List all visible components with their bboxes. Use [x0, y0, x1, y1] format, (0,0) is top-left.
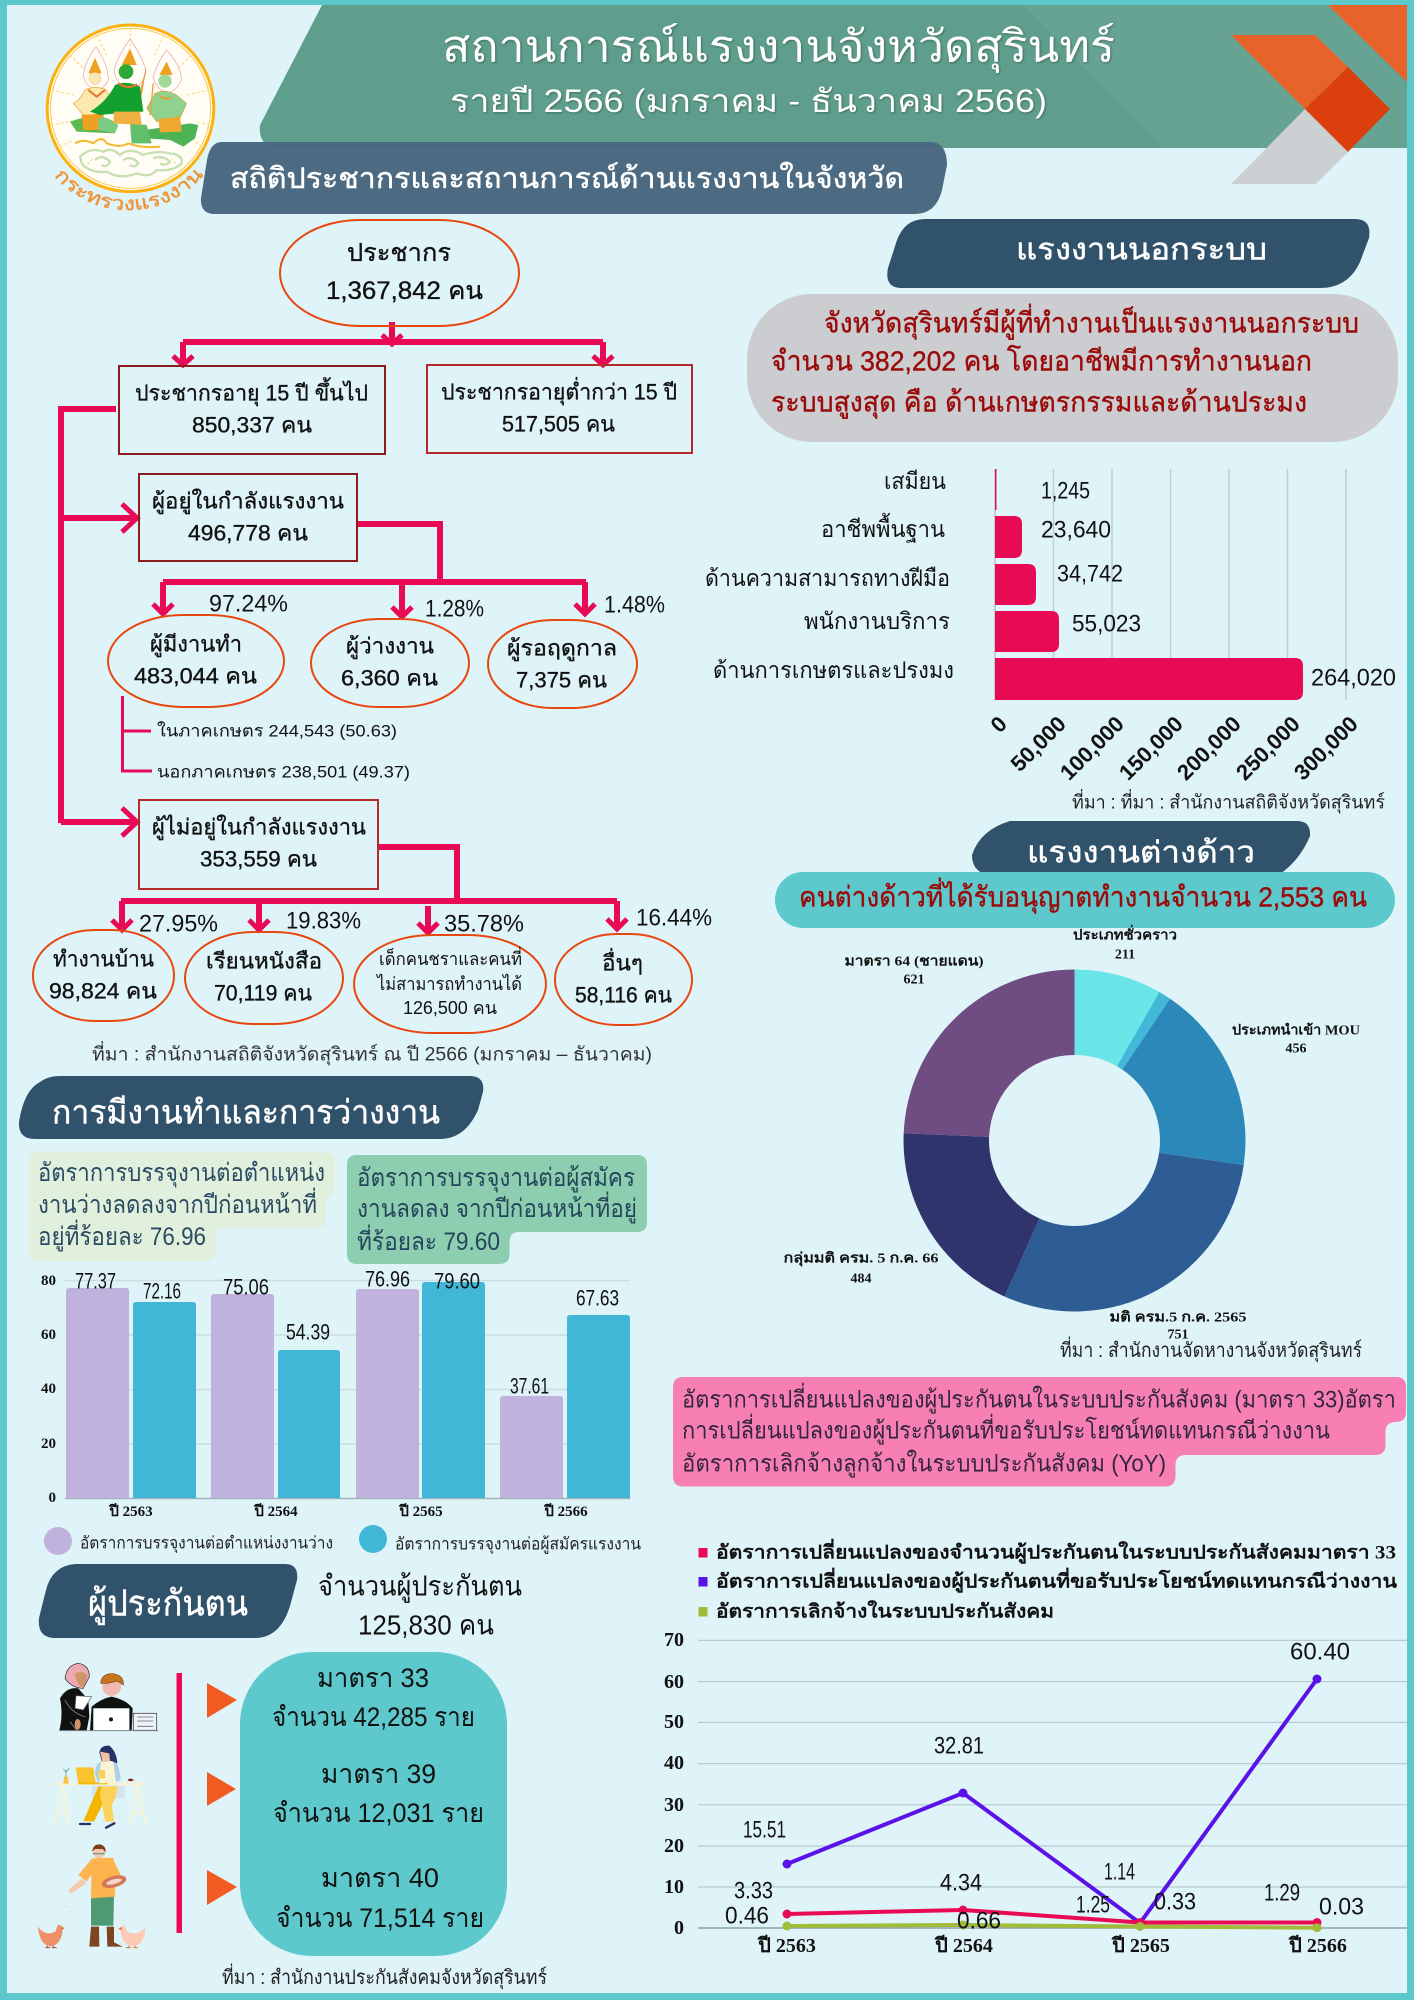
node: population: ประชากร: [347, 239, 451, 267]
divider bar: [176, 1673, 182, 1933]
bar chart axis labels: 50,000: [1006, 711, 1071, 776]
percentages: outside labour force: 19.83%: [286, 908, 361, 934]
heading: employment and unemployment: การมีงานทำและการว่างงาน: [52, 1094, 440, 1130]
flow diagram connectors: [61, 322, 627, 933]
donut labels: มติ ครม.5 ก.ค. 2565: [1110, 1310, 1246, 1326]
value labels: 15.51: [743, 1816, 786, 1844]
callout: placement per vacancy: อัตราการบรรจุงานต่อตำแหน่ง: [38, 1159, 325, 1188]
percent: unemployed: 1.28%: [425, 596, 484, 622]
node: housework: ทำงานบ้าน: [53, 946, 154, 972]
value labels: 3.33: [734, 1878, 773, 1904]
legend: line chart: อัตราการเลิกจ้างในระบบประกันสังคม: [716, 1600, 1054, 1622]
agriculture breakdown: นอกภาคเกษตร 238,501 (49.37): [157, 762, 410, 782]
callout: licensed migrant total: คนต่างด้าวที่ได้รับอนุญาตทำงานจำนวน 2,553 คน: [799, 878, 1367, 914]
donut labels: ประเภทนำเข้า MOU: [1232, 1022, 1360, 1038]
bar chart value labels: 1,245: [1041, 478, 1090, 504]
y axis labels: [41, 1273, 56, 1506]
node: children, elderly and unable to work: 126,500 คน: [403, 998, 497, 1018]
value labels: 37.61: [510, 1374, 549, 1398]
value labels: 77.37: [75, 1268, 116, 1294]
node: seasonal workers: [488, 620, 637, 708]
heading: insured persons: [39, 1564, 297, 1638]
x axis labels: [108, 1503, 588, 1520]
bar chart axis labels: 150,000: [1114, 711, 1188, 785]
callout: placement per vacancy: งานว่างลดลงจากปีก่อนหน้าที่: [38, 1187, 317, 1219]
logo cloud: [80, 150, 182, 176]
callout: social security rates: [673, 1377, 1406, 1486]
node: population: 1,367,842 คน: [326, 277, 483, 305]
y axis labels: 0: [674, 1917, 684, 1939]
callout: placement per vacancy: [28, 1152, 335, 1261]
value labels: 72.16: [143, 1278, 181, 1304]
value labels: 0.33: [1154, 1888, 1196, 1916]
y axis labels: 40: [664, 1752, 684, 1774]
heading: employment and unemployment: [19, 1076, 483, 1139]
value labels: [75, 1266, 619, 1398]
bar chart category labels: พนักงานบริการ: [804, 608, 950, 634]
bar chart category labels: ด้านความสามารถทางฝีมือ: [705, 565, 950, 591]
percentages: outside labour force: 16.44%: [636, 904, 712, 932]
arrows: [207, 1683, 237, 1905]
donut labels: 456: [1286, 1042, 1306, 1056]
x axis labels: ปี 2565: [398, 1503, 443, 1520]
source: insured persons: ที่มา : สำนักงานประกันสังคมจังหวัดสุรินทร์: [222, 1963, 547, 1990]
logo figure: centre deity: [90, 48, 152, 143]
donut labels: 211: [1115, 948, 1135, 962]
y axis labels: 20: [41, 1436, 56, 1452]
legend: placement rates: [44, 1525, 641, 1555]
node: housework: 98,824 คน: [49, 978, 157, 1004]
heading: insured persons: ผู้ประกันตน: [88, 1582, 248, 1626]
node: studying: 70,119 คน: [214, 980, 312, 1006]
source: population: ที่มา : สำนักงานสถิติจังหวัดสุรินทร์ ณ ปี 2566 (มกราคม – ธันวาคม): [92, 1040, 652, 1066]
callout: placement per applicant: [347, 1155, 647, 1264]
node: children, elderly and unable to work: [354, 935, 546, 1033]
node: outside labour force: 353,559 คน: [200, 846, 317, 872]
percentages: outside labour force: 35.78%: [444, 910, 524, 938]
y axis labels: 70: [664, 1629, 684, 1651]
y axis labels: 20: [664, 1835, 684, 1857]
node: age 15 and over: ประชากรอายุ 15 ปี ขึ้นไป: [135, 378, 368, 406]
y axis labels: 0: [48, 1490, 56, 1506]
donut labels: 484: [850, 1272, 872, 1286]
x axis labels: ปี 2563: [108, 1503, 153, 1520]
percentages: outside labour force: 27.95%: [139, 910, 218, 938]
heading: migrant workers: [972, 821, 1310, 874]
legend: line chart: อัตราการเปลี่ยนแปลงของจำนวนผู้ประกันตนในระบบประกันสังคมมาตรา 33: [716, 1538, 1396, 1564]
bar chart category labels: ด้านการเกษตรและปรงมง: [713, 657, 954, 683]
callout: social security rates: อัตราการเลิกจ้างลูกจ้างในระบบประกันสังคม (YoY): [682, 1450, 1166, 1478]
node: studying: [185, 932, 343, 1024]
node: under 15: ประชากรอายุต่ำกว่า 15 ปี: [441, 376, 677, 406]
heading: informal labour: แรงงานนอกระบบ: [1016, 234, 1267, 266]
callout: informal labour summary: จังหวัดสุรินทร์มีผู้ที่ทำงานเป็นแรงงานนอกระบบ: [824, 304, 1359, 340]
node: age 15 and over: 850,337 คน: [192, 412, 312, 438]
title banner: [260, 5, 1407, 148]
panel: insured sections: มาตรา 33: [317, 1663, 429, 1693]
heading: population and labour statistics: สถิติประชากรและสถานการณ์ด้านแรงงานในจังหวัด: [230, 161, 904, 195]
y axis labels: [664, 1629, 684, 1939]
legend: placement rates: อัตราการบรรจุงานต่อผู้สมัครแรงงาน: [395, 1534, 641, 1554]
source: informal labour: ที่มา : ที่มา : สำนักงานสถิติจังหวัดสุรินทร์: [1072, 788, 1385, 814]
percentages: outside labour force: [139, 904, 712, 938]
node: children, elderly and unable to work: ไม่สามารถทำงานได้: [375, 973, 522, 994]
node: others: อื่นๆ: [602, 948, 643, 976]
value labels: 67.63: [576, 1286, 619, 1310]
node: under 15: 517,505 คน: [502, 412, 615, 436]
y axis labels: 60: [664, 1671, 684, 1693]
bar chart value labels: 264,020: [1311, 664, 1396, 692]
panel: insured sections: จำนวน 12,031 ราย: [273, 1798, 484, 1828]
value labels: 4.34: [940, 1870, 982, 1896]
value labels: 76.96: [365, 1266, 410, 1292]
node: employed: [108, 615, 284, 707]
bar chart category labels: เสมียน: [884, 468, 946, 494]
panel: insured sections: จำนวน 42,285 ราย: [272, 1702, 475, 1732]
x axis labels: ปี 2563: [757, 1934, 816, 1957]
donut labels: 751: [1168, 1328, 1188, 1342]
x axis labels: ปี 2566: [1288, 1934, 1347, 1957]
line chart: social security rates: [664, 1629, 1407, 1957]
node: in labour force: ผู้อยู่ในกำลังแรงงาน: [152, 488, 344, 514]
value labels: 54.39: [286, 1320, 330, 1344]
node: unemployed: 6,360 คน: [341, 666, 438, 690]
panel: insured sections: มาตรา 39: [321, 1759, 436, 1789]
bar chart value labels: 23,640: [1041, 516, 1111, 544]
node: outside labour force: [139, 800, 378, 889]
bar chart axis labels: [985, 711, 1363, 785]
icon: office workers: [59, 1663, 158, 1731]
column chart: placement rates: [41, 1266, 630, 1520]
bar chart axis labels: 100,000: [1055, 711, 1129, 785]
y axis labels: 30: [664, 1794, 684, 1816]
donut chart: migrant workers by type: [904, 970, 1245, 1311]
callout: informal labour summary: ระบบสูงสุด คือ ด้านเกษตรกรรมและด้านประมง: [771, 386, 1307, 420]
bar chart axis labels: 300,000: [1289, 711, 1363, 785]
logo figure: right deity: [145, 62, 198, 147]
callout: licensed migrant total: [775, 872, 1395, 928]
icon: farmer feeding chickens: [38, 1844, 145, 1948]
callout: placement per applicant: ที่ร้อยละ 79.60: [357, 1224, 500, 1256]
donut labels: [784, 924, 1360, 1342]
x axis labels: ปี 2564: [253, 1503, 298, 1520]
node: under 15: [427, 365, 692, 453]
donut labels: 621: [904, 972, 924, 988]
source: migrant workers: ที่มา : สำนักงานจัดหางานจังหวัดสุรินทร์: [1060, 1336, 1362, 1363]
bar chart category labels: [705, 468, 954, 683]
donut labels: กลุ่มมติ ครม. 5 ก.ค. 66: [784, 1250, 938, 1266]
legend: line chart: [698, 1538, 1397, 1622]
bar chart value labels: 55,023: [1072, 610, 1141, 638]
node: studying: เรียนหนังสือ: [206, 948, 322, 974]
x axis labels: [757, 1934, 1347, 1957]
heading: informal labour: [887, 219, 1369, 288]
callout: placement per applicant: อัตราการบรรจุงานต่อผู้สมัคร: [357, 1164, 635, 1193]
heading: migrant workers: แรงงานต่างด้าว: [1027, 836, 1255, 870]
value labels: 0.03: [1319, 1894, 1364, 1920]
x axis labels: ปี 2566: [543, 1503, 588, 1520]
node: housework: [33, 930, 174, 1021]
value labels: 60.40: [1290, 1638, 1350, 1666]
bar chart: informal labour by occupation: [705, 468, 1396, 785]
donut labels: มาตรา 64 (ชายแดน): [844, 954, 984, 970]
bars: per vacancy: [66, 1288, 563, 1498]
title: สถานการณ์แรงงานจังหวัดสุรินทร์: [442, 22, 1115, 74]
node: seasonal workers: ผู้รอฤดูกาล: [507, 636, 617, 662]
bars: per applicant: [133, 1282, 630, 1498]
heading: population and labour statistics: [201, 142, 947, 214]
line: section 33 insured: [782, 1906, 1322, 1927]
x axis labels: ปี 2564: [934, 1934, 993, 1957]
value labels: 0.46: [725, 1902, 769, 1930]
node: outside labour force: ผู้ไม่อยู่ในกำลังแรงงาน: [152, 814, 366, 840]
callout: social security rates: การเปลี่ยนแปลงของผู้ประกันตนที่ขอรับประโยชน์ทดแทนกรณีว่างงาน: [682, 1414, 1330, 1446]
node: unemployed: ผู้ว่างงาน: [346, 634, 434, 660]
value labels: 1.25: [1076, 1892, 1110, 1918]
bar chart value labels: 34,742: [1057, 560, 1123, 588]
value labels: 1.29: [1264, 1880, 1300, 1906]
node: age 15 and over: [119, 366, 385, 454]
line: termination rate: [782, 1920, 1322, 1932]
value labels: [725, 1638, 1364, 1934]
insured persons total: 125,830 คน: [358, 1610, 494, 1640]
value labels: 0.66: [957, 1908, 1001, 1934]
legend: line chart: อัตราการเปลี่ยนแปลงของผู้ประกันตนที่ขอรับประโยชน์ทดแทนกรณีว่างงาน: [716, 1568, 1397, 1594]
decorative corner shapes: [1231, 5, 1407, 184]
node: children, elderly and unable to work: เด็กคนชราและคนที่: [379, 946, 522, 969]
node: others: [555, 934, 692, 1025]
node: seasonal workers: 7,375 คน: [516, 668, 607, 692]
percent: employed: 97.24%: [209, 590, 288, 618]
node: in labour force: [139, 474, 357, 561]
node: unemployed: [311, 619, 469, 707]
node: in labour force: 496,778 คน: [188, 520, 308, 546]
value labels: 79.60: [434, 1268, 480, 1294]
bar chart value labels: [1041, 478, 1396, 692]
callout: informal labour summary: จำนวน 382,202 คน โดยอาชีพมีการทำงานนอก: [771, 344, 1312, 376]
bar chart axis labels: 250,000: [1231, 711, 1305, 785]
bar chart axis labels: 200,000: [1172, 711, 1246, 785]
y axis labels: 40: [41, 1381, 56, 1397]
logo arc text: กระทรวงแรงงาน: [55, 170, 203, 210]
y axis labels: 10: [664, 1876, 684, 1898]
x axis labels: ปี 2565: [1111, 1934, 1170, 1957]
insured persons total: [318, 1570, 522, 1640]
panel: insured sections: มาตรา 40: [321, 1863, 439, 1893]
value labels: 75.06: [223, 1274, 269, 1300]
node: population: [280, 220, 519, 326]
node: others: 58,116 คน: [575, 982, 672, 1008]
callout: informal labour summary: [747, 294, 1398, 442]
insured persons total: จำนวนผู้ประกันตน: [318, 1570, 522, 1604]
value labels: 1.14: [1104, 1858, 1135, 1886]
legend: placement rates: อัตราการบรรจุงานต่อตำแหน่งงานว่าง: [80, 1534, 333, 1554]
agriculture breakdown: ในภาคเกษตร 244,543 (50.63): [157, 720, 397, 740]
callout: placement per applicant: งานลดลง จากปีก่อนหน้าที่อยู่: [357, 1191, 637, 1224]
panel: insured sections: [240, 1652, 507, 1956]
title: รายปี 2566 (มกราคม - ธันวาคม 2566): [450, 83, 1047, 119]
y axis labels: 50: [664, 1711, 684, 1733]
bar chart category labels: อาชีพพื้นฐาน: [821, 513, 945, 543]
ministry of labour logo: [46, 24, 216, 210]
logo figure: left deity: [70, 58, 117, 133]
node: employed: 483,044 คน: [134, 664, 257, 688]
callout: placement per vacancy: อยู่ที่ร้อยละ 76.96: [38, 1219, 206, 1252]
bar chart axis labels: 0: [985, 711, 1012, 738]
agriculture breakdown: [157, 720, 410, 782]
donut labels: ประเภทชั่วคราว: [1073, 924, 1177, 944]
panel: insured sections: จำนวน 71,514 ราย: [276, 1903, 484, 1933]
line: benefit claimants: [782, 1674, 1322, 1928]
title: [442, 22, 1115, 119]
percent: seasonal: 1.48%: [604, 592, 665, 618]
value labels: 32.81: [934, 1732, 984, 1760]
y axis labels: 60: [41, 1327, 56, 1343]
node: employed: ผู้มีงานทำ: [150, 632, 242, 658]
y axis labels: 80: [41, 1273, 56, 1289]
icon: woman working at desk: [54, 1746, 146, 1828]
